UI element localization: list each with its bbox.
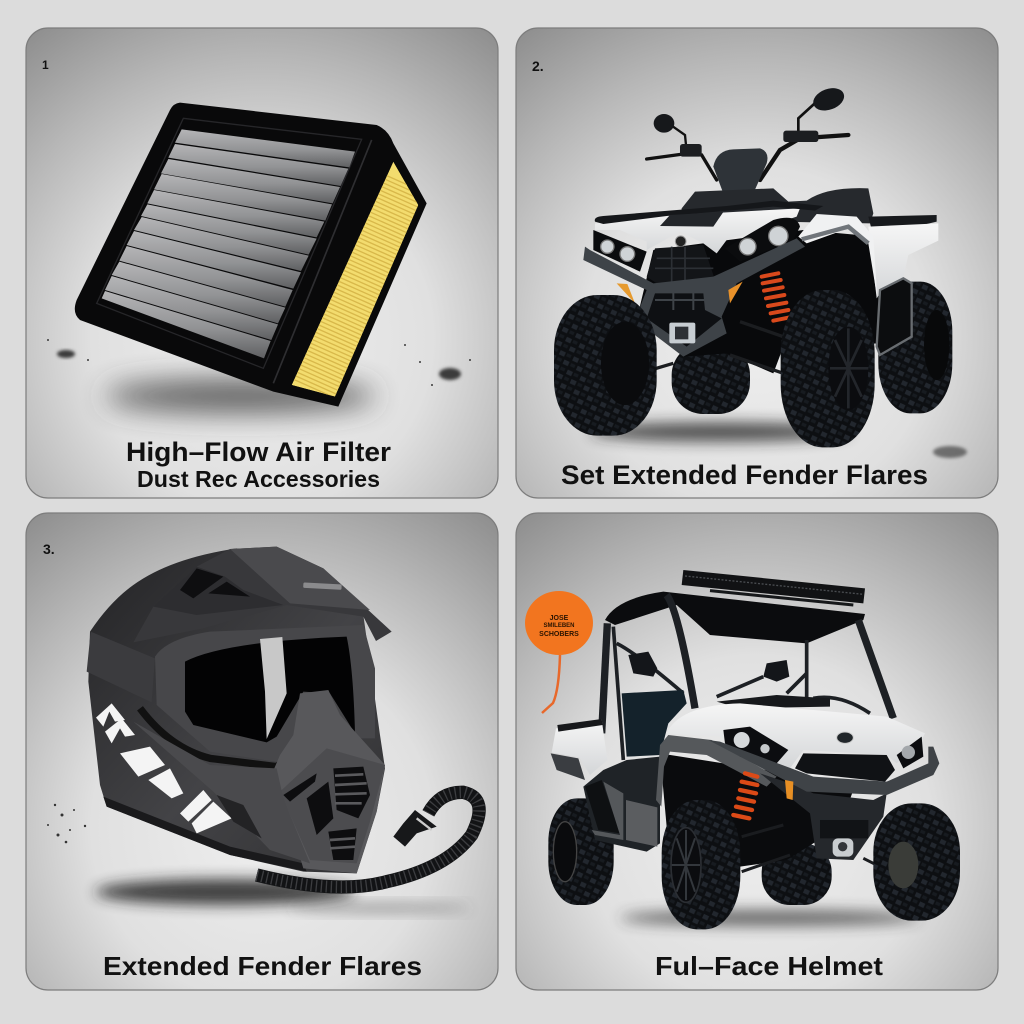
spring [733,773,757,818]
filter pleats [102,129,355,358]
mask and chin guard [270,690,385,873]
ground shadow [620,910,920,926]
rear bed [552,719,607,775]
suspension spring [762,273,790,321]
winch [820,820,868,838]
icon: orange air tag: SMILEBEN [543,623,575,629]
rear fender [868,223,938,298]
grille [647,245,715,283]
dust [47,804,86,843]
lower front [760,773,887,860]
label: ATV heading: Set Extended Fender Flares [561,460,928,490]
lens reflection [260,637,287,739]
headlights [601,226,788,261]
hood [595,208,800,253]
icon: orange air tag: SCHOBERS [539,631,579,638]
icon: ATV quad bike [554,84,952,447]
logo [675,236,686,247]
panel 1: air filter [26,28,498,498]
dash and seat [713,148,767,193]
rear rack [868,215,937,226]
dust [933,446,967,458]
tag text: JOSE [550,615,569,622]
visor peak [133,547,392,642]
helmet shadow [95,879,355,905]
label: item number 2: 2. [532,58,544,74]
door and lower body [583,757,660,852]
suspension arms [742,825,900,877]
goggle frame [155,625,375,763]
grille [795,753,895,782]
roll cage [602,595,893,733]
label: filter subheading: Dust Rec Accessories [137,466,380,492]
headlight housings [593,230,647,272]
indicator [785,780,793,800]
panel 3: helmet [26,513,498,990]
front fender [798,214,877,298]
shell [88,548,385,873]
shadow under filter [105,379,375,413]
light bar [682,570,865,603]
badge [837,732,853,743]
panel 2: ATV [516,28,998,498]
cheek panel [133,722,310,863]
front bumper [708,740,939,795]
dark band under goggles [140,708,313,767]
label: helmet heading: Extended Fender Flares [103,951,422,981]
label: item number 3: 3. [43,541,55,557]
label: UTV heading: Ful–Face Helmet [655,951,883,981]
far front wheel inner [762,843,832,905]
front bumper [583,238,805,357]
hood [667,703,925,768]
mouth vents [283,767,370,860]
icon: orange air tag [525,591,593,713]
hose connector [393,810,437,847]
dash top [717,695,830,708]
handlebars and mirrors [647,84,848,180]
icon: air filter [75,103,427,407]
front wheels [554,290,875,447]
air hose [257,792,479,887]
dust [47,339,471,386]
icon: side-by-side UTV [548,570,960,929]
label: filter heading: High–Flow Air Filter [126,437,392,467]
seat [622,690,687,757]
white logo stripes [96,703,232,833]
mud guard [877,278,912,355]
winch plate [669,323,695,343]
rear wheel left [548,798,614,905]
roof [605,592,865,643]
goggle strap [87,632,155,702]
front wheels [662,800,960,929]
ground shadow [590,422,850,442]
panel 4: UTV [516,513,998,990]
yellow paper element [292,162,418,397]
mirrors [628,652,789,682]
body underside [637,230,880,373]
mesh side vent [217,795,262,838]
label: item number 1: 1 [42,58,49,72]
fender flare [656,735,777,807]
suspension arms [656,320,782,374]
rear wheels [672,282,952,414]
body dark chassis [660,753,853,867]
front rack [595,201,823,224]
headlights [723,727,788,763]
lens [185,637,355,742]
icon: full-face helmet with air hose [87,547,479,887]
indicator lights [617,283,635,303]
